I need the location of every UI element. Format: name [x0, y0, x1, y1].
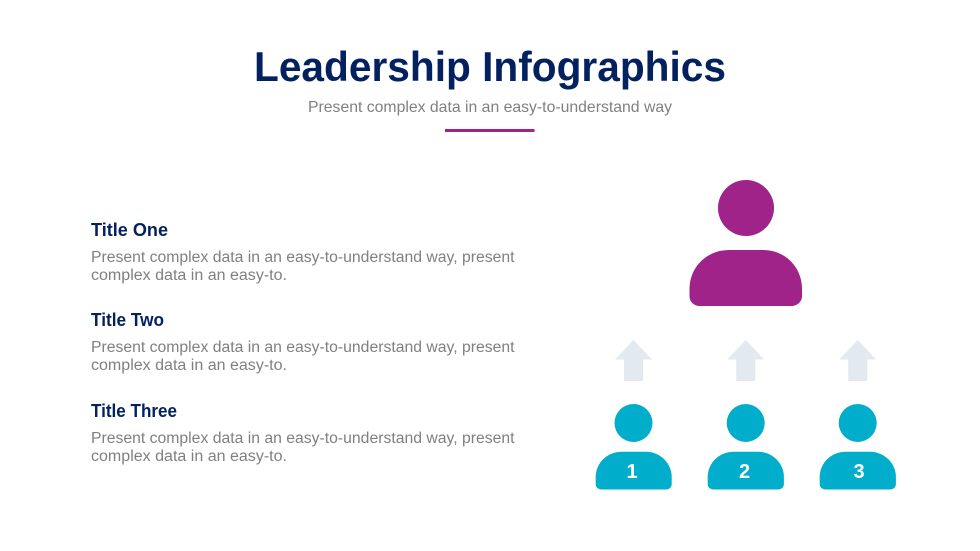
- text block: title one: complex data in an easy-to.: [91, 267, 287, 284]
- arrow: up from person 1: [615, 340, 652, 381]
- arrow: up from person 2: [727, 340, 764, 381]
- icon: leader person: [690, 180, 802, 306]
- text block: title two: Present complex data in an easy-to-understand way, present: [91, 339, 515, 356]
- text block: title two: Title Two: [91, 310, 164, 330]
- text block: title three: [91, 401, 515, 465]
- text block: title two: complex data in an easy-to.: [91, 357, 287, 374]
- text block: title three: complex data in an easy-to.: [91, 448, 287, 465]
- subtitle: Present complex data in an easy-to-understand way: [308, 99, 672, 116]
- text block: title three: Present complex data in an easy-to-understand way, present: [91, 430, 515, 447]
- arrow: up from person 3: [839, 340, 876, 381]
- title: Leadership Infographics: [254, 43, 726, 90]
- icon: person 1: 1: [626, 461, 638, 483]
- icon: person 2: [708, 404, 784, 490]
- title underline accent: [445, 129, 534, 132]
- text block: title one: Title One: [91, 220, 168, 240]
- text block: title three: Title Three: [91, 401, 177, 421]
- icon: person 1: [596, 404, 672, 490]
- text block: title one: [91, 220, 515, 284]
- icon: person 3: [820, 404, 896, 490]
- icon: person 2: 2: [739, 461, 750, 483]
- icon: person 3: 3: [853, 461, 865, 483]
- text block: title one: Present complex data in an easy-to-understand way, present: [91, 249, 515, 266]
- text block: title two: [91, 310, 515, 374]
